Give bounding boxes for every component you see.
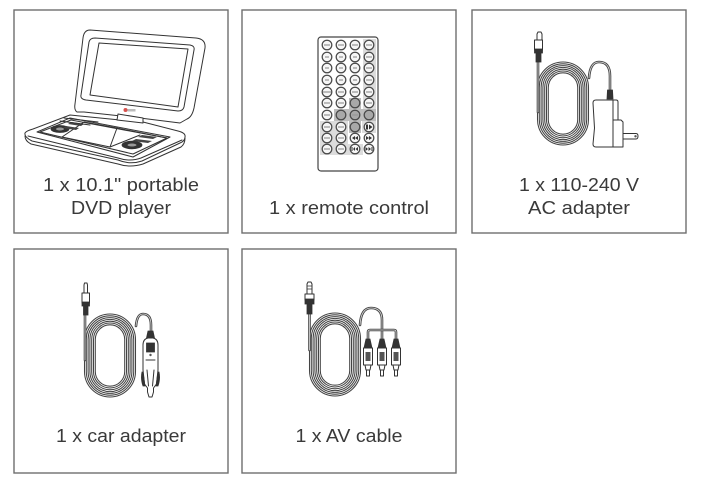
- caption: 1 x 110-240 V: [519, 175, 639, 195]
- panel: remote control: [242, 10, 456, 233]
- panel: AV cable: [242, 249, 456, 473]
- icon: portable DVD player: [25, 30, 205, 166]
- caption: AC adapter: [528, 198, 630, 218]
- caption: [519, 175, 639, 218]
- icon: AV cable: [305, 282, 400, 396]
- panel: car adapter: [14, 249, 228, 473]
- icon: car adapter: [82, 283, 160, 397]
- icon: remote control: [318, 37, 378, 171]
- caption: 1 x car adapter: [56, 426, 186, 446]
- panel: AC adapter: [472, 10, 686, 233]
- panel: DVD player: [14, 10, 228, 233]
- caption: [43, 175, 199, 218]
- caption: 1 x 10.1" portable: [43, 175, 199, 195]
- caption: 1 x remote control: [269, 198, 429, 218]
- caption: DVD player: [71, 198, 171, 218]
- icon: AC adapter: [534, 32, 638, 147]
- caption: 1 x AV cable: [296, 426, 402, 446]
